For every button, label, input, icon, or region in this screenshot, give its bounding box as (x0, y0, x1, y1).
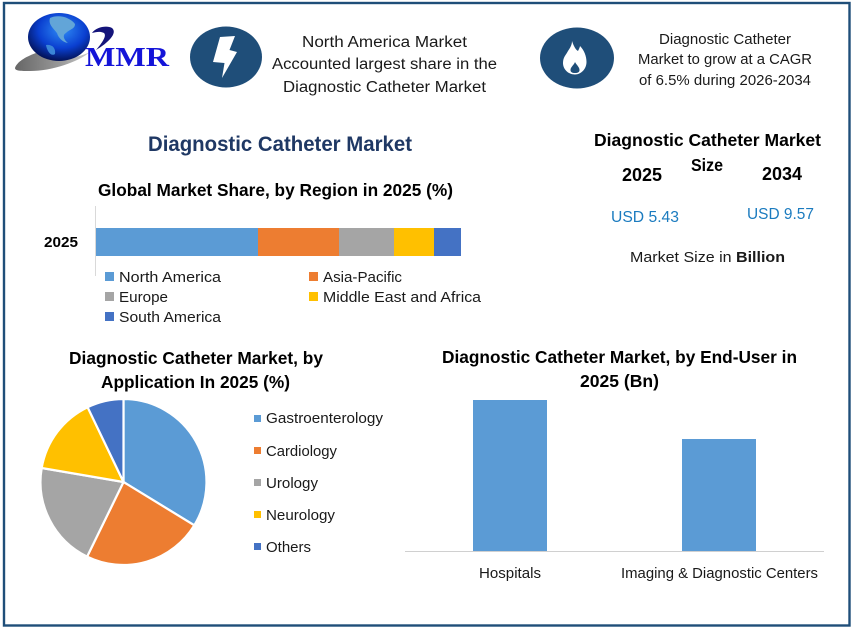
callout: CAGR: Market to grow at a CAGR (638, 52, 812, 68)
MMR logo: MMR (85, 42, 170, 72)
icon: flame (540, 28, 614, 88)
pie legend: Gastroenterology (266, 411, 384, 427)
column chart (405, 400, 824, 552)
stacked bar heading: Global Market Share, by Region in 2025 (%) (98, 180, 453, 200)
bar legend (105, 270, 482, 326)
market size heading: Diagnostic Catheter Market (594, 130, 821, 150)
callout: CAGR: of 6.5% during 2026-2034 (639, 73, 811, 89)
pie legend (254, 411, 384, 556)
pie legend: Others (266, 540, 311, 556)
market size heading: Size (691, 155, 723, 175)
callout: North America: Diagnostic Catheter Market (283, 79, 487, 96)
market size heading (594, 130, 821, 175)
column heading (442, 347, 797, 391)
pie legend: Urology (266, 476, 319, 492)
pie legend: Cardiology (266, 444, 338, 460)
stacked bar (96, 228, 461, 256)
column heading: Diagnostic Catheter Market, by End-User in (442, 347, 797, 367)
callout: CAGR: Diagnostic Catheter (659, 32, 791, 48)
column labels (479, 566, 818, 582)
pie legend: Neurology (266, 508, 336, 524)
column panel: end-user (405, 347, 824, 582)
column labels: Imaging & Diagnostic Centers (621, 566, 818, 582)
MMR logo (15, 13, 170, 72)
title: Diagnostic Catheter Market (148, 133, 412, 156)
value 2034: USD 9.57 (747, 206, 814, 223)
axis label: 2025 (44, 235, 78, 251)
bar legend: North America (119, 270, 222, 286)
bar legend: South America (119, 310, 222, 326)
unit note: Market Size in Billion (630, 249, 785, 266)
bar legend: Europe (119, 290, 168, 306)
callout: North America (272, 34, 497, 96)
year 2034: 2034 (762, 164, 802, 184)
pie heading: Diagnostic Catheter Market, by (69, 348, 323, 368)
year 2025: 2025 (622, 165, 662, 185)
value 2025: USD 5.43 (611, 209, 679, 226)
bar legend: Middle East and Africa (323, 290, 482, 306)
callout: North America: Accounted largest share in the (272, 56, 497, 73)
pie heading: Application In 2025 (%) (101, 372, 290, 392)
pie panel: application (41, 348, 384, 565)
column heading: 2025 (Bn) (580, 371, 659, 391)
column labels: Hospitals (479, 566, 541, 582)
stacked bar panel: region share (44, 180, 482, 326)
bar legend: Asia-Pacific (323, 270, 402, 286)
callout: CAGR (638, 32, 812, 89)
icon: lightning bolt (190, 26, 262, 88)
market size panel (594, 130, 821, 266)
pie heading (69, 348, 323, 392)
callout: North America: North America Market (302, 34, 468, 51)
pie chart (41, 399, 206, 565)
